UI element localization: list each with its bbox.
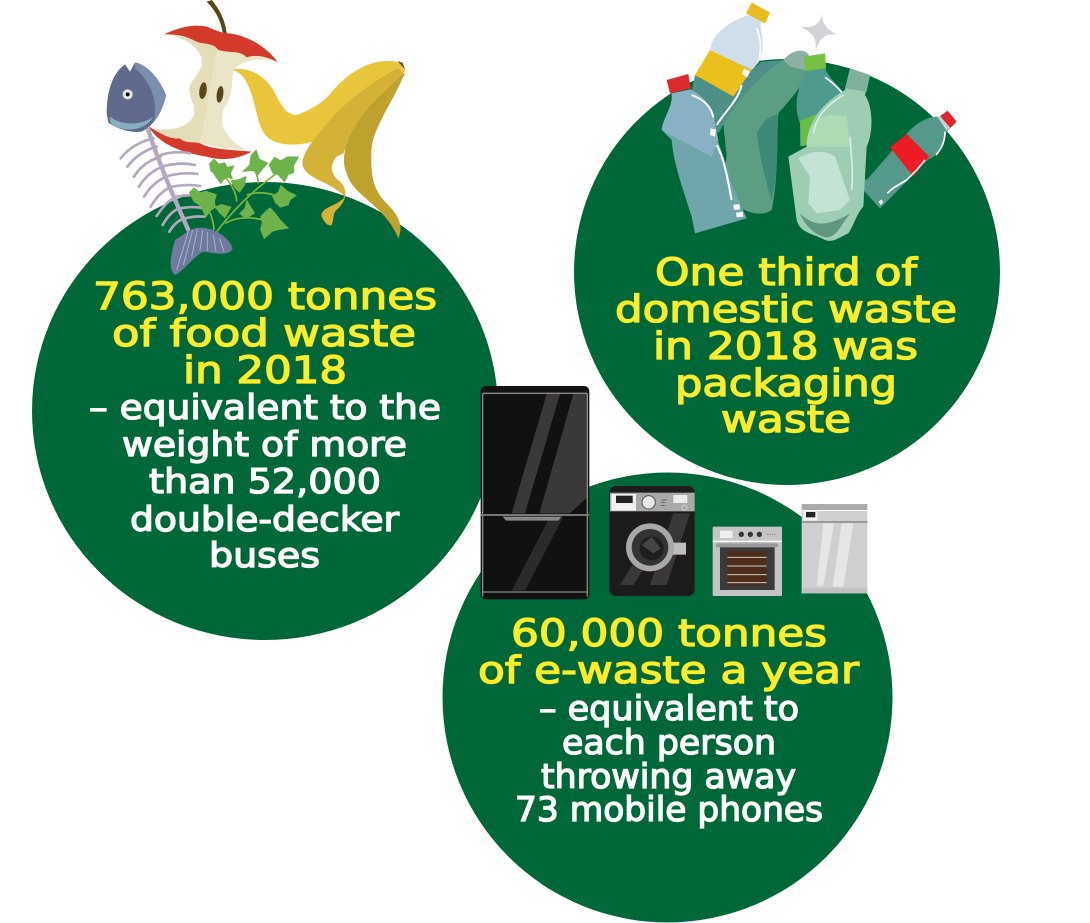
icon: clear front bottle bbox=[788, 68, 871, 241]
text: food waste comparison: than 52,000 bbox=[149, 462, 381, 502]
text: food waste comparison: double-decker bbox=[130, 500, 399, 540]
text: e-waste comparison: each person bbox=[562, 723, 776, 763]
icon: parsley bbox=[191, 152, 297, 237]
text: food waste comparison: – equivalent to the bbox=[89, 388, 441, 428]
icon: fish skeleton bbox=[107, 62, 233, 275]
panel: packaging waste circle bbox=[574, 2, 1000, 485]
icon: banana peel bbox=[231, 61, 405, 238]
icon: dishwasher bbox=[802, 504, 867, 593]
text: food waste comparison bbox=[89, 388, 441, 576]
text: packaging headline: domestic waste bbox=[615, 288, 957, 331]
illustration: plastic bottles bbox=[662, 2, 957, 241]
text: e-waste comparison: – equivalent to bbox=[539, 689, 799, 729]
icon: sparkle bbox=[801, 13, 838, 50]
text: packaging headline bbox=[615, 251, 957, 441]
icon: fridge bbox=[481, 386, 589, 599]
icon: small red label bottle bbox=[855, 111, 957, 208]
icon: apple core bbox=[148, 0, 278, 159]
text: food waste comparison: weight of more bbox=[122, 425, 407, 465]
icon: green cap bottle bbox=[797, 53, 847, 147]
icon: washing machine bbox=[609, 486, 695, 596]
text: e-waste headline: of e-waste a year bbox=[478, 649, 860, 692]
icon: oven bbox=[713, 527, 782, 596]
text: packaging headline: One third of bbox=[655, 251, 918, 294]
icon: crushed green bottle bbox=[723, 51, 809, 214]
text: e-waste comparison bbox=[515, 689, 823, 830]
panel: e-waste circle bbox=[442, 386, 892, 922]
text: packaging headline: waste bbox=[721, 398, 851, 441]
text: e-waste comparison: 73 mobile phones bbox=[515, 790, 823, 830]
text: e-waste headline bbox=[478, 612, 860, 692]
icon: bottle with yellow label bbox=[690, 2, 783, 133]
text: e-waste headline: 60,000 tonnes bbox=[511, 612, 827, 655]
text: packaging headline: packaging bbox=[675, 362, 897, 405]
panel: food waste circle bbox=[32, 0, 498, 640]
text: packaging headline: in 2018 was bbox=[653, 325, 918, 368]
text: food waste headline bbox=[93, 275, 437, 392]
illustration: food scraps bbox=[107, 0, 405, 275]
text: e-waste comparison: throwing away bbox=[541, 757, 796, 797]
text: food waste headline: 763,000 tonnes bbox=[93, 275, 437, 318]
text: food waste headline: of food waste bbox=[112, 312, 416, 355]
text: food waste comparison: buses bbox=[209, 536, 320, 576]
text: food waste headline: in 2018 bbox=[183, 349, 347, 392]
icon: left crushed bottle bbox=[662, 74, 747, 233]
illustration: appliances bbox=[481, 386, 867, 599]
